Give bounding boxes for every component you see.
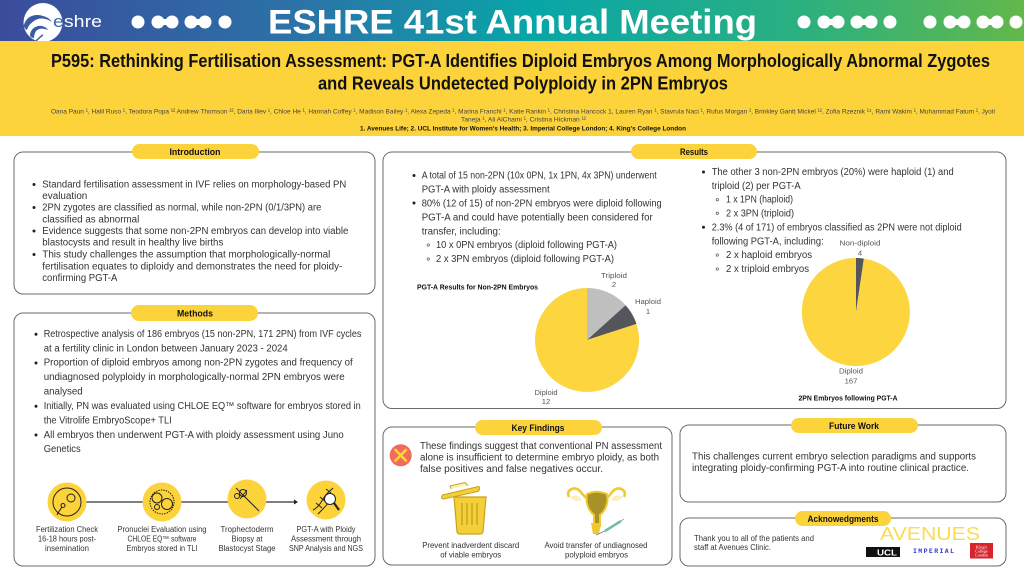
- pie chart: PGT-A results for non-2PN embryos: [417, 271, 661, 406]
- heading: future work: [791, 418, 918, 433]
- logo: King's College London: London: [975, 552, 988, 558]
- panel: future work: [680, 418, 1006, 502]
- pie chart: PGT-A results for non-2PN embryos: Triploid: [601, 271, 627, 280]
- step label: fertilization check: [36, 525, 98, 553]
- pie chart: 2PN embryos following PGT-A: Diploid: [839, 366, 863, 376]
- step label: pronuclei evaluation: Pronuclei Evaluation using: [118, 525, 206, 534]
- text block: results left: A total of 15 non-2PN (10x 0PN, 1x 1PN, 4x 3PN) underwent: [422, 171, 657, 182]
- logo: King's College London: College: [975, 548, 988, 554]
- text block: key findings: [420, 441, 662, 475]
- step label: fertilization check: insemination: [45, 544, 89, 553]
- icon: fertilization check: [48, 482, 86, 522]
- panel: results: [383, 144, 1006, 408]
- icon: red cross: [390, 444, 412, 466]
- icon: PGT-A DNA and magnifier: [306, 480, 346, 520]
- text block: methods bullets: All embryos then underwent PGT-A with ploidy assessment using Juno: [44, 430, 344, 441]
- text block: introduction bullets: [32, 179, 349, 284]
- pie chart: PGT-A results for non-2PN embryos: 12: [542, 397, 550, 406]
- caption: avoid transfer: [544, 541, 648, 560]
- heading: results: Results: [680, 146, 708, 157]
- arrow: workflow line: [86, 500, 298, 504]
- step label: PGT-A: PGT-A with Ploidy: [296, 525, 356, 534]
- text block: introduction bullets: 2PN zygotes are classified as normal, while non-2PN (0/1/3PN) are: [42, 203, 322, 214]
- text block: results right: 2.3% (4 of 171) of embryos classified as 2PN were not diploid: [712, 222, 962, 233]
- caption: prevent discard: [422, 541, 519, 560]
- pie chart: PGT-A results for non-2PN embryos: PGT-A Results for Non-2PN Embryos: [417, 282, 538, 292]
- logo: Avenues: AVENUES: [880, 524, 980, 544]
- heading: introduction: [132, 144, 259, 159]
- step label: biopsy: Trophectoderm: [220, 525, 274, 534]
- text block: results right: The other 3 non-2PN embryos (20%) were haploid (1) and: [712, 167, 954, 178]
- step label: PGT-A: [289, 525, 363, 553]
- poster title: [51, 51, 990, 94]
- text block: results right: 2 x haploid embryos: [726, 250, 812, 261]
- step label: fertilization check: 16-18 hours post-: [38, 534, 96, 544]
- affiliations: 1. Avenues Life; 2. UCL Institute for Women's Health; 3. Imperial College London; 4. King's College London: [360, 126, 686, 132]
- caption: avoid transfer: Avoid transfer of undiagnosed: [544, 541, 648, 550]
- text block: methods bullets: Proportion of diploid embryos among non-2PN zygotes and frequency of: [44, 358, 353, 369]
- text block: introduction bullets: This study challenges the assumption that morphologically-normal: [42, 250, 330, 261]
- caption: prevent discard: of viable embryos: [440, 550, 501, 560]
- title band: [0, 41, 1024, 136]
- step label: pronuclei evaluation: CHLOE EQ™ software: [128, 534, 196, 544]
- step label: biopsy: Blastocyst Stage: [218, 544, 276, 553]
- text block: methods bullets: analysed: [44, 387, 83, 398]
- text block: methods bullets: Retrospective analysis of 186 embryos (15 non-2PN, 171 2PN) from IVF cycles: [44, 329, 361, 340]
- text block: results left: 80% (12 of 15) of non-2PN embryos were diploid following: [422, 198, 662, 209]
- decorative dots: left: [132, 16, 232, 28]
- logo: King's College London: [970, 543, 993, 558]
- step label: PGT-A: Assessment through: [291, 534, 361, 544]
- text block: future work: integrating ploidy-confirming PGT-A into routine clinical practice.: [692, 463, 969, 474]
- text block: results left: 2 x 3PN embryos (diploid following PGT-A): [436, 254, 614, 265]
- pie chart: 2PN embryos following PGT-A: 2PN Embryos following PGT-A: [798, 394, 898, 402]
- header banner: [0, 0, 1024, 42]
- pie chart: 2PN embryos following PGT-A: Non-diploid: [840, 238, 880, 248]
- pie chart: 2PN embryos following PGT-A: 167: [845, 376, 857, 386]
- icon: trash can: [442, 482, 486, 534]
- heading: key findings: [475, 420, 602, 435]
- text block: future work: [692, 452, 976, 474]
- logo: Imperial: IMPERIAL: [913, 548, 954, 555]
- panel: methods: [14, 305, 375, 566]
- text block: results left: 10 x 0PN embryos (diploid following PGT-A): [436, 240, 617, 251]
- icon: trophectoderm biopsy: [228, 480, 266, 518]
- heading: results: [631, 144, 757, 159]
- text block: acknowledgments: [694, 534, 814, 552]
- text block: introduction bullets: fertilisation equates to diploidy and demonstrates the need for ploidy-: [42, 261, 342, 272]
- text block: methods bullets: at a fertility clinic in London between January 2023 - 2024: [44, 343, 288, 354]
- pie chart: PGT-A results for non-2PN embryos: 2: [612, 280, 616, 289]
- text block: introduction bullets: classified as abnormal: [42, 214, 139, 225]
- event title: ESHRE 41st Annual Meeting: [268, 4, 757, 42]
- heading: acknowledgments: Acknowedgments: [808, 513, 878, 524]
- heading: introduction: Introduction: [170, 146, 221, 157]
- caption: avoid transfer: polyploid embryos: [565, 550, 628, 560]
- heading: key findings: Key Findings: [512, 422, 564, 433]
- text block: methods bullets: Genetics: [44, 444, 81, 455]
- logo: King's College London: King's: [976, 544, 988, 550]
- text block: methods bullets: undiagnosed polyploidy in morphologically-normal 2PN embryos were: [44, 372, 345, 383]
- heading: methods: Methods: [177, 308, 213, 318]
- authors: Taneja ¹, Ali AlChami ¹, Cristina Hickman ¹²: [461, 117, 587, 124]
- text block: introduction bullets: Evidence suggests that some non-2PN embryos can develop into viable: [42, 226, 349, 237]
- authors: [51, 108, 995, 124]
- step label: fertilization check: Fertilization Check: [36, 525, 98, 534]
- text block: results right: 1 x 1PN (haploid): [726, 195, 793, 206]
- step label: PGT-A: SNP Analysis and NGS: [289, 544, 363, 553]
- panel: acknowledgments: [680, 511, 1006, 566]
- pie chart: PGT-A results for non-2PN embryos: Haploid: [635, 297, 661, 306]
- text block: introduction bullets: blastocysts and result in healthy live births: [42, 238, 223, 249]
- text block: results left: transfer, including:: [422, 226, 501, 237]
- text block: results left: [412, 171, 662, 265]
- text block: acknowledgments: staff at Avenues Clinic.: [694, 543, 771, 552]
- decorative dots: right: [798, 16, 1022, 28]
- step label: pronuclei evaluation: Embryos stored in TLI: [126, 544, 198, 553]
- text block: future work: This challenges current embryo selection paradigms and supports: [692, 452, 976, 462]
- logo: UCL: UCL: [877, 548, 897, 558]
- poster title: and Reveals Undetected Polyploidy in 2PN Embryos: [318, 74, 728, 94]
- caption: prevent discard: Prevent inadverdent discard: [422, 541, 519, 550]
- icon: uterus and syringe: [568, 488, 625, 535]
- panel: introduction: [14, 144, 375, 294]
- heading: acknowledgments: [795, 511, 891, 526]
- heading: future work: Future Work: [829, 420, 880, 431]
- workflow diagram: [36, 480, 363, 553]
- text block: acknowledgments: Thank you to all of the patients and: [694, 534, 814, 543]
- text block: methods bullets: [34, 329, 361, 455]
- pie chart: 2PN embryos following PGT-A: 4: [858, 248, 862, 258]
- text block: methods bullets: Initially, PN was evaluated using CHLOE EQ™ software for embryos stored in: [44, 401, 361, 412]
- logo: eshre: [20, 3, 102, 42]
- text block: results right: [702, 167, 962, 275]
- text block: results left: PGT-A and could have potentially been considered for: [422, 212, 653, 223]
- pie chart: PGT-A results for non-2PN embryos: Diploid: [534, 388, 558, 397]
- icon: pronuclei evaluation: [142, 482, 182, 522]
- pie chart: 2PN embryos following PGT-A: [798, 238, 910, 402]
- authors: Oana Paun ¹, Halil Ruso ¹, Teodora Popa ¹² Andrew Thomson ¹², Daria Iliev ¹, Chloe He ¹, Hannah Coffey ¹, Madison Bailey ¹, Alexa Zepeda ¹, Marina Franchi ¹, Katie Rankin ¹, Christina Hancock 1, Lauren Ryan ¹, Stavrula Naci ¹, Rufus Morgan ¹, Brinkley Gantt Mickel ¹², Zofia Rzeznik ¹⁴, Rami Wakim ¹, Muhammad Fatum ¹, Jyoti: [51, 108, 995, 116]
- text block: results right: 2 x 3PN (triploid): [726, 208, 794, 219]
- text block: introduction bullets: evaluation: [42, 191, 87, 202]
- text block: results left: PGT-A with ploidy assessment: [422, 185, 550, 196]
- text block: results right: triploid (2) per PGT-A: [712, 181, 801, 192]
- text block: introduction bullets: Standard fertilisation assessment in IVF relies on morphology-based PN: [42, 179, 346, 190]
- heading: methods: [131, 305, 258, 321]
- step label: biopsy: Biopsy at: [232, 534, 263, 544]
- text block: results right: 2 x triploid embryos: [726, 264, 809, 275]
- text block: key findings: false positives and false negatives occur.: [420, 464, 603, 475]
- text block: key findings: alone is insufficient to determine embryo ploidy, as both: [420, 453, 659, 464]
- logo: eshre: eshre: [53, 12, 102, 31]
- text block: introduction bullets: confirming PGT-A: [42, 273, 118, 284]
- text block: methods bullets: the Vitrolife EmbryoScope+ TLI: [44, 415, 172, 426]
- step label: pronuclei evaluation: [118, 525, 206, 553]
- logo: UCL: [866, 547, 900, 558]
- text block: key findings: These findings suggest that conventional PN assessment: [420, 441, 662, 452]
- text block: results right: following PGT-A, including:: [712, 236, 824, 247]
- step label: biopsy: [218, 525, 276, 553]
- pie chart: PGT-A results for non-2PN embryos: 1: [646, 307, 650, 316]
- panel: key findings: [383, 420, 672, 565]
